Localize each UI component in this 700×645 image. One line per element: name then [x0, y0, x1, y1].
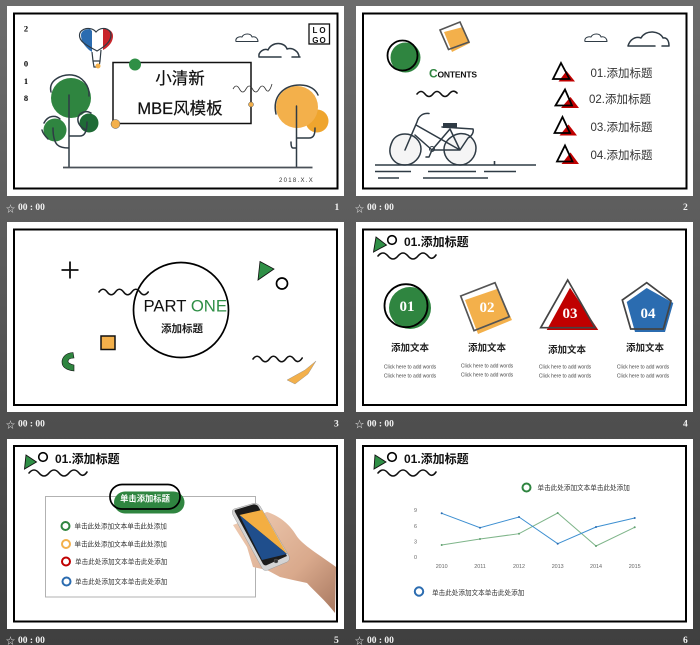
- list item 02: [556, 90, 651, 108]
- footer: slide 1: [6, 203, 340, 214]
- squiggle left: [99, 289, 148, 295]
- logo box: LO: [312, 26, 328, 35]
- list row orange: 单击此处添加文本单击此处添加: [74, 540, 167, 548]
- list item 01: 01.添加标题: [590, 66, 653, 80]
- date: 2018.X.X: [279, 178, 314, 184]
- item 02 square: Click here to add words: [461, 372, 514, 378]
- footer: slide 2: ☆: [355, 204, 364, 214]
- footer: slide 2: 00 : 00: [367, 203, 394, 213]
- button pill: [110, 484, 184, 514]
- icon: cloud: [585, 34, 607, 42]
- icon: plus: [62, 262, 78, 278]
- item 04 pentagon: Click here to add words: [617, 364, 670, 370]
- vertical year text: 1: [24, 76, 28, 86]
- vertical year text: 0: [24, 58, 28, 68]
- icon: orange square: [101, 336, 115, 350]
- line chart: [414, 508, 641, 570]
- list row red: [62, 557, 168, 566]
- list row red: 单击此处添加文本单击此处添加: [75, 557, 168, 566]
- panel: slide 3 part one: [7, 222, 344, 412]
- section header: [374, 234, 469, 259]
- footer: slide 4: [355, 420, 688, 430]
- line chart: 3: [414, 540, 417, 546]
- line chart: 2012: [513, 564, 525, 570]
- line chart: 6: [414, 524, 417, 530]
- panel: slide 4 four shapes: [356, 222, 693, 412]
- list row orange: [62, 540, 167, 548]
- line chart: 2011: [474, 564, 486, 570]
- footer: slide 1: 00 : 00: [18, 203, 45, 213]
- item 02 square: 添加文本: [468, 342, 506, 354]
- vertical year text: 8: [24, 93, 28, 103]
- section header: [24, 451, 120, 476]
- icon: cloud large: [628, 32, 669, 46]
- list row green: [62, 522, 167, 530]
- footer: slide 1: 1: [334, 203, 340, 213]
- item 04 pentagon: 添加文本: [626, 342, 664, 354]
- panel: slide 2 contents: [356, 6, 693, 196]
- item 04 pentagon: 04: [640, 306, 656, 322]
- list item 03: [554, 117, 653, 136]
- line chart: 9: [414, 508, 417, 514]
- list item 01: [553, 63, 653, 82]
- icon: small circle: [276, 278, 288, 289]
- item 02 square: Click here to add words: [461, 364, 514, 370]
- vertical year text: 2: [24, 24, 28, 34]
- list item 03: 03.添加标题: [590, 120, 653, 134]
- icon: green circle: [388, 40, 420, 72]
- logo box: [309, 24, 330, 45]
- item 03 triangle: Click here to add words: [539, 374, 592, 380]
- item 01 circle: [384, 284, 437, 380]
- section header: 01.添加标题: [404, 451, 469, 466]
- footer: slide 3: 00 : 00: [18, 420, 45, 430]
- footer: slide 3: ☆: [6, 420, 15, 430]
- item 03 triangle: Click here to add words: [539, 364, 592, 370]
- icon: bicycle: [390, 113, 476, 165]
- contents heading: CONTENTS: [429, 66, 477, 80]
- ground lines: [375, 161, 536, 178]
- list row blue: 单击此处添加文本单击此处添加: [75, 577, 168, 586]
- ground line: [63, 166, 312, 168]
- item 01 circle: 添加文本: [391, 342, 429, 354]
- squiggle right: [253, 356, 302, 362]
- footer: slide 3: [6, 420, 339, 430]
- panel: slide 5 phone list: [7, 439, 344, 629]
- icon: green arc: [62, 352, 74, 371]
- section title: 添加标题: [161, 322, 203, 335]
- button pill: 单击添加标题: [120, 494, 171, 504]
- icon: green tree: [42, 75, 98, 167]
- icon: tilted square: [440, 22, 470, 52]
- item 03 triangle: 添加文本: [548, 344, 586, 356]
- section header: 01.添加标题: [404, 234, 469, 249]
- list row blue: [62, 577, 168, 586]
- footer: slide 2: 2: [683, 203, 688, 213]
- icon: orange shard: [287, 361, 316, 384]
- item 04 pentagon: [617, 283, 673, 380]
- item 01 circle: Click here to add words: [384, 374, 437, 380]
- line chart: 2014: [590, 564, 602, 570]
- list item 02: 02.添加标题: [589, 92, 651, 106]
- line chart: 2013: [552, 564, 564, 570]
- line chart: 2015: [629, 564, 641, 570]
- section header: [374, 451, 469, 476]
- legend blue: [415, 587, 525, 597]
- icon: clouds: [236, 34, 300, 57]
- title box: [111, 58, 254, 128]
- footer: slide 4: 00 : 00: [367, 420, 394, 430]
- squiggle: [417, 91, 457, 96]
- footer: slide 6: [355, 636, 688, 645]
- footer: slide 1: ☆: [6, 204, 15, 214]
- list box: [46, 496, 256, 597]
- footer: slide 2: [355, 203, 688, 214]
- footer: slide 4: ☆: [355, 420, 364, 430]
- title box: MBE风模板: [137, 99, 223, 118]
- title box: 小清新: [155, 69, 205, 88]
- icon: phone in hand: [232, 503, 336, 613]
- item 02 square: 02: [480, 300, 494, 316]
- list row green: 单击此处添加文本单击此处添加: [74, 522, 167, 530]
- footer: slide 4: 4: [683, 420, 688, 430]
- part one heading: PART ONE: [144, 296, 227, 316]
- icon: large circle: [134, 262, 228, 358]
- panel: slide 1 cover: [7, 6, 344, 196]
- item 03 triangle: [539, 280, 598, 380]
- item 01 circle: 01: [400, 299, 414, 315]
- squiggle: [233, 84, 272, 92]
- legend green: 单击此处添加文本单击此处添加: [538, 483, 630, 492]
- item 03 triangle: 03: [562, 306, 578, 322]
- item 01 circle: Click here to add words: [384, 364, 437, 370]
- item 02 square: [461, 283, 514, 378]
- line chart: 2010: [436, 564, 448, 570]
- icon: orange tree: [275, 85, 328, 167]
- legend blue: 单击此处添加文本单击此处添加: [432, 588, 525, 597]
- line chart: 0: [414, 555, 417, 561]
- section header: 01.添加标题: [55, 451, 120, 466]
- item 04 pentagon: Click here to add words: [617, 374, 670, 380]
- icon: green triangle: [258, 262, 274, 280]
- footer: slide 3: 3: [334, 420, 339, 430]
- icon: heart balloon: [79, 28, 113, 68]
- list item 04: [557, 146, 653, 164]
- legend green: [522, 483, 630, 492]
- footer: slide 5: [6, 636, 339, 645]
- panel: slide 6 line chart: [356, 439, 693, 629]
- logo box: GO: [312, 36, 327, 45]
- list item 04: 04.添加标题: [590, 148, 653, 162]
